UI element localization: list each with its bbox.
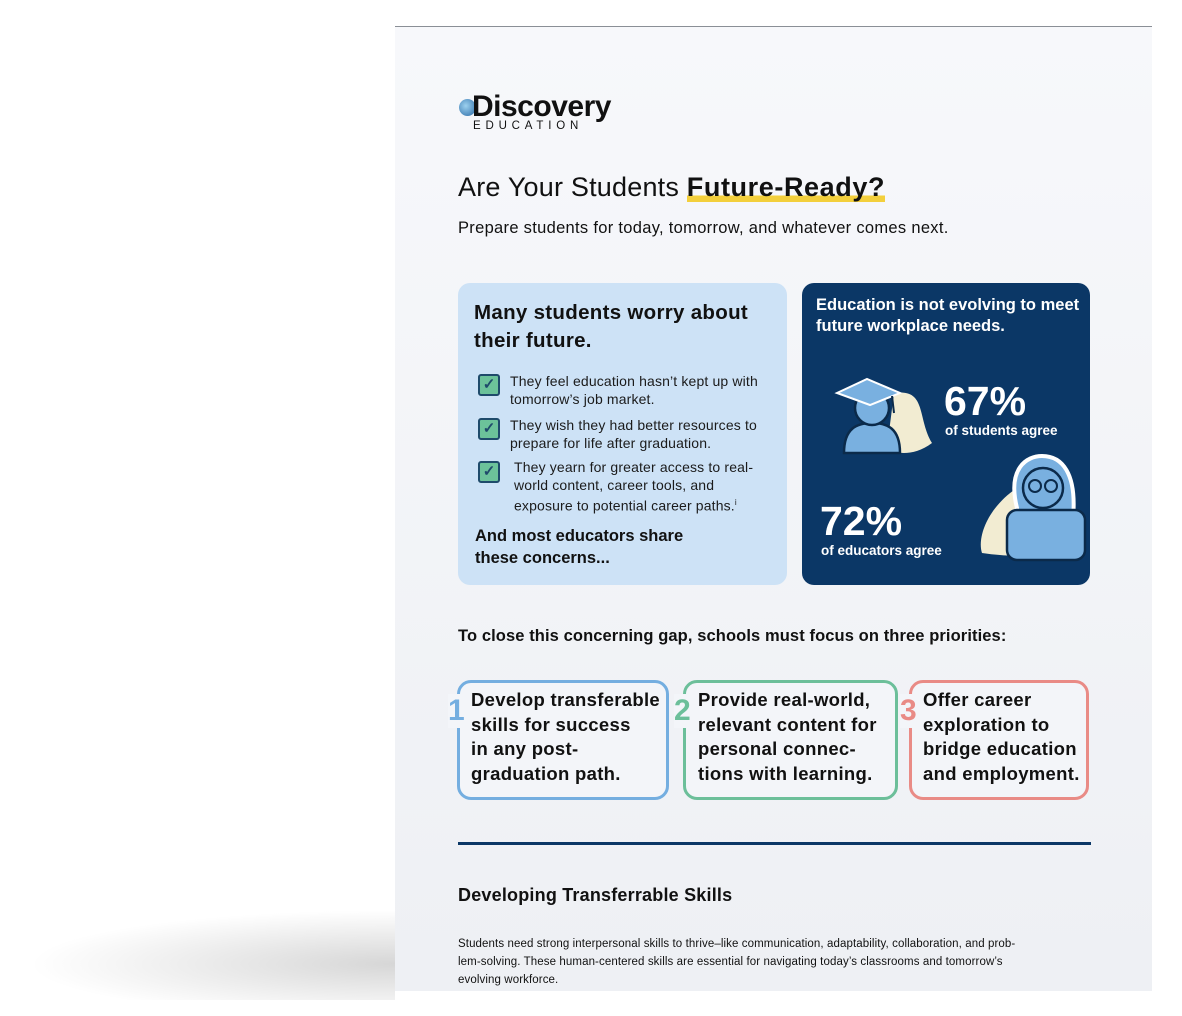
priority 3: and employment. [923,762,1080,784]
item 2: prepare for life after graduation. [510,435,711,451]
priority 2 [674,680,898,800]
priority 1: in any post- [471,738,578,759]
item 1: They feel education hasn’t kept up with [510,373,758,389]
item 2: They wish they had better resources to [510,417,757,433]
priority 1: skills for success [471,714,631,734]
priority 2: Provide real-world, [698,689,870,710]
panel heading [474,301,748,352]
section lead-in: To close this concerning gap, schools must focus on three priorities: [458,627,1006,645]
subtitle: Prepare students for today, tomorrow, and whatever comes next. [458,219,949,237]
priority 1: 1 [448,694,465,727]
panel: statistics [802,283,1090,585]
panel heading [816,296,1079,335]
body text: Students need strong interpersonal skills to thrive–like communication, adaptability, collaboration, and prob- [458,938,1015,950]
body text: lem-solving. These human-centered skills are essential for navigating today’s classrooms and tomorrow’s [458,956,1003,968]
icon: educator [980,454,1086,562]
priority 2: personal connec- [698,738,856,759]
stat: 72%: 72% [820,498,902,544]
priority 2: relevant content for [698,714,877,734]
body text [458,938,1015,986]
panel heading: future workplace needs. [816,317,1005,335]
priority 3 [900,680,1089,800]
logo: Discovery [472,90,611,123]
item 3: They yearn for greater access to real- [514,459,753,475]
body text: evolving workforce. [458,974,558,986]
page sheet [395,26,1152,991]
priority 1 [448,680,669,800]
item 3 [478,459,753,514]
priority 3: exploration to [923,714,1050,734]
priority 2: 2 [674,694,691,727]
panel heading: their future. [474,329,592,352]
priority 3: 3 [900,694,917,727]
item 1: tomorrow’s job market. [510,391,655,407]
priority 3: Offer career [923,689,1032,710]
section heading: Developing Transferrable Skills [458,885,732,905]
panel heading: Education is not evolving to meet [816,296,1079,314]
item 3: exposure to potential career paths.i [514,498,737,514]
item 1 [478,373,758,407]
stat: 67%: of students agree [945,423,1058,438]
closing text: And most educators share [475,527,683,545]
priority 1: graduation path. [471,762,621,784]
priority 2: tions with learning. [698,762,873,784]
stat: 67% [944,378,1058,438]
logo: EDUCATION [473,120,583,132]
item 2 [478,417,757,451]
panel: student worries [458,283,787,585]
icon: graduate [834,378,932,454]
item 2: ✓ [483,420,495,437]
item 3: ✓ [483,463,495,480]
closing text: these concerns... [475,549,610,567]
closing text [475,527,683,567]
priority 3: bridge education [923,738,1077,759]
stat: 72% [820,498,942,558]
priority 1: Develop transferable [471,689,660,710]
stat: 67%: 67% [944,378,1026,424]
item 3: world content, career tools, and [514,477,714,493]
title: Are Your Students Future-Ready? [458,172,885,202]
item 1: ✓ [483,376,495,393]
panel heading: Many students worry about [474,301,748,324]
stat: 72%: of educators agree [821,543,942,558]
icon: globe [459,99,476,116]
